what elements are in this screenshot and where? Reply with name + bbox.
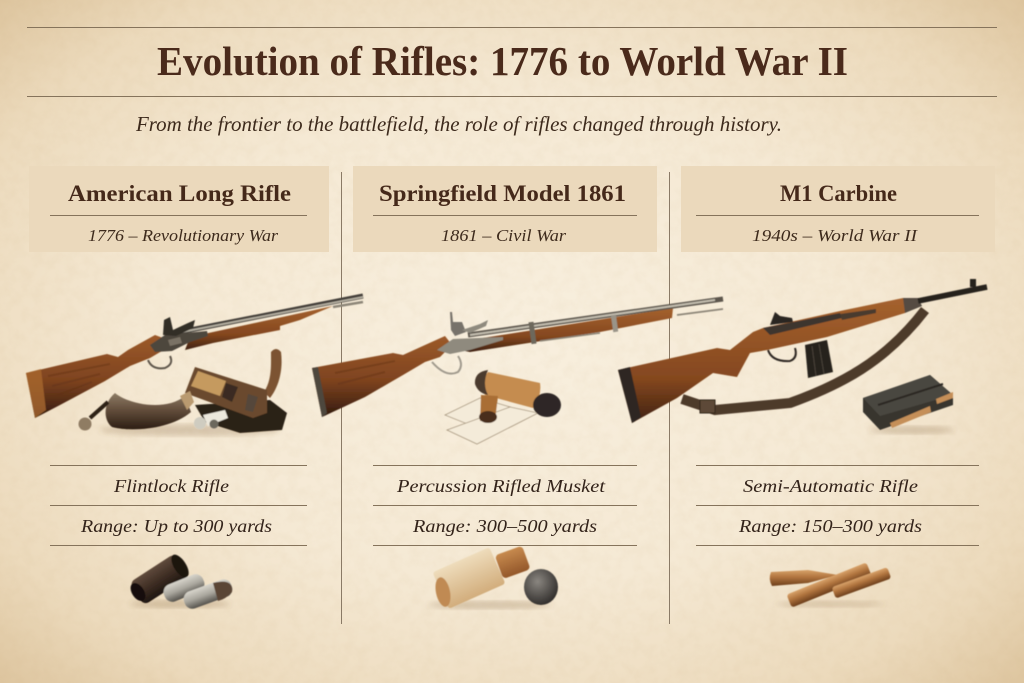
illustration: cartridge, cork and paper [445,370,561,444]
details: Flintlock Rifle, range [50,466,307,546]
panel: American Long Rifle [26,166,363,611]
details: Flintlock Rifle, range: Range: Up to 300 yards [80,516,272,536]
illustration: powder horn and pouch [78,349,287,436]
icon: paper cartridge and lead balls [128,552,235,611]
details: Percussion Rifled Musket, range: Range: 300–500 yards [412,516,597,536]
illustration: flintlock rifle [26,296,363,418]
header: Springfield Model 1861: Springfield Model 1861 [379,181,626,206]
details: Flintlock Rifle, range: Flintlock Rifle [113,476,229,496]
header: M1 Carbine: 1940s – World War II [752,226,919,245]
icon: paper cartridge and minie ball [428,546,558,609]
header: American Long Rifle: American Long Rifle [68,181,291,206]
header: Springfield Model 1861: 1861 – Civil War [441,226,566,245]
title: Evolution of Rifles: 1776 to World War II [157,38,848,84]
details: Semi-Automatic Rifle, range: Semi-Automatic Rifle [743,476,918,496]
header: American Long Rifle [29,166,329,252]
panel: Springfield Model 1861 [312,166,723,609]
illustration: percussion rifled musket [312,299,723,417]
details: Percussion Rifled Musket, range [373,466,637,546]
header: Springfield Model 1861 [353,166,657,252]
details: Semi-Automatic Rifle, range [696,466,979,546]
illustration: magazine clip [863,375,954,434]
subtitle: From the frontier to the battlefield, the role of rifles changed through history. [135,112,782,136]
details: Semi-Automatic Rifle, range: Range: 150–300 yards [738,516,922,536]
header: M1 Carbine: M1 Carbine [780,181,897,206]
illustration: semi-automatic carbine with sling [618,279,987,423]
details: Percussion Rifled Musket, range: Percussion Rifled Musket [396,476,606,496]
icon: brass cartridges [770,562,891,608]
header: American Long Rifle: 1776 – Revolutionary War [88,226,278,245]
header: M1 Carbine [681,166,995,252]
panel: M1 Carbine [618,166,995,608]
